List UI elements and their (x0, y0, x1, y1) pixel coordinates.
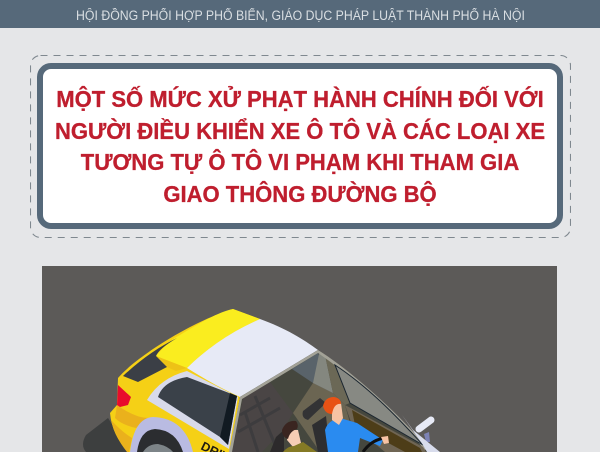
steering wheel (363, 438, 386, 452)
illustration panel (42, 266, 557, 452)
wheel (137, 429, 183, 452)
cabin interior (230, 350, 428, 452)
side window glass (335, 365, 423, 445)
title panel (37, 63, 563, 229)
rear quarter glass (292, 353, 333, 393)
tail light (117, 385, 131, 407)
lower bumper shade (115, 405, 148, 428)
rear spoiler window (123, 338, 177, 382)
header bar: HỘI ĐỒNG PHỐI HỢP PHỔ BIẾN, GIÁO DỤC PHÁP LUẬT THÀNH PHỐ HÀ NỘI (76, 8, 524, 23)
driver head (332, 403, 343, 425)
driver hair (323, 397, 341, 414)
wheel arch (130, 417, 193, 452)
bumper corner shade (111, 420, 132, 452)
car hood edge (402, 415, 440, 452)
spoiler underside (156, 356, 187, 371)
passenger head (287, 430, 301, 447)
illustration: car with driver and passenger (83, 309, 440, 452)
window surround (147, 371, 238, 449)
mirror mount (424, 432, 430, 442)
driver torso (325, 418, 383, 452)
headrest (303, 398, 326, 420)
passenger torso (283, 442, 317, 452)
dashed frame (30, 55, 571, 238)
dash dark trim (352, 410, 422, 452)
rear seat (232, 382, 293, 452)
passenger hair (282, 421, 298, 439)
driver seat (312, 416, 330, 452)
roof pillar outline (229, 350, 428, 452)
rear quarter glass light (313, 354, 333, 393)
centre pillar (325, 355, 350, 405)
driver hand (381, 436, 389, 444)
car body yellow (110, 309, 260, 452)
title (55, 86, 545, 207)
title: MỘT SỐ MỨC XỬ PHẠT HÀNH CHÍNH ĐỐI VỚI (56, 86, 544, 112)
window dark reflection (220, 393, 237, 445)
yellow roof (156, 309, 260, 368)
car shadow (83, 418, 130, 452)
header bar (0, 0, 600, 28)
passenger seat (270, 430, 284, 452)
side mirror (419, 420, 431, 429)
seat grid lines (238, 396, 280, 452)
rear side window (158, 377, 237, 445)
title: GIAO THÔNG ĐƯỜNG BỘ (163, 181, 437, 207)
hub (143, 444, 173, 452)
title: TƯƠNG TỰ Ô TÔ VI PHẠM KHI THAM GIA (81, 149, 519, 175)
white roof (187, 319, 318, 397)
dashboard (345, 405, 426, 452)
title: NGƯỜI ĐIỀU KHIỂN XE Ô TÔ VÀ CÁC LOẠI XE (55, 118, 545, 144)
cabin tan panel (293, 383, 352, 452)
